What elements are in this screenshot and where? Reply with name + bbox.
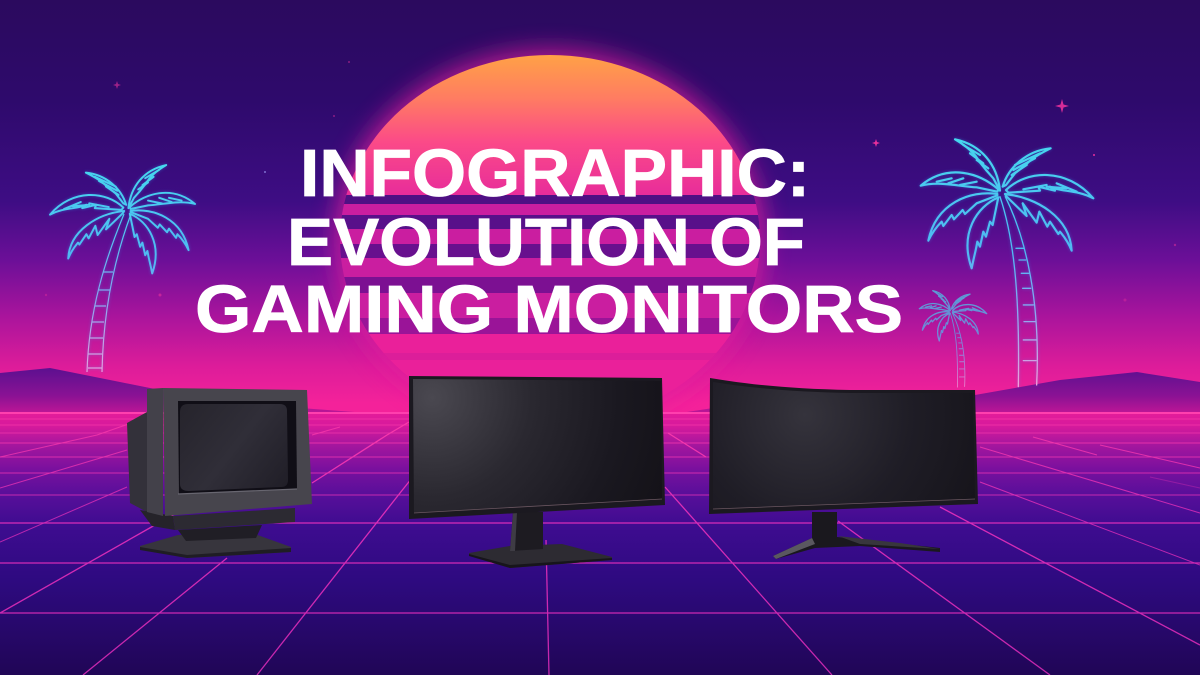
title: GAMING MONITORS [195, 272, 903, 347]
CRT base [140, 525, 291, 558]
CRT monitor [127, 388, 312, 558]
flat monitor stand [469, 512, 612, 568]
title [195, 136, 903, 347]
neon palm tree: left [50, 165, 195, 372]
neon palm tree: right large [921, 139, 1093, 387]
stars [45, 61, 1176, 302]
flat monitor [409, 376, 665, 568]
neon grid floor [0, 412, 1200, 675]
neon palm tree: right small [919, 291, 987, 387]
flat monitor body [409, 376, 665, 519]
sun glow [334, 49, 766, 431]
sky background [0, 0, 1200, 420]
CRT front bezel [147, 388, 312, 516]
flat monitor screen [413, 379, 662, 513]
title: EVOLUTION OF [287, 205, 805, 280]
striped retro sun [340, 55, 760, 384]
title: INFOGRAPHIC: [300, 136, 810, 211]
curved monitor screen [713, 382, 975, 509]
CRT back housing [127, 412, 295, 530]
curved monitor body [709, 378, 978, 514]
curved monitor stand [773, 512, 940, 559]
CRT screen [178, 401, 297, 494]
distant hills [0, 368, 1200, 416]
curved monitor [709, 378, 978, 559]
